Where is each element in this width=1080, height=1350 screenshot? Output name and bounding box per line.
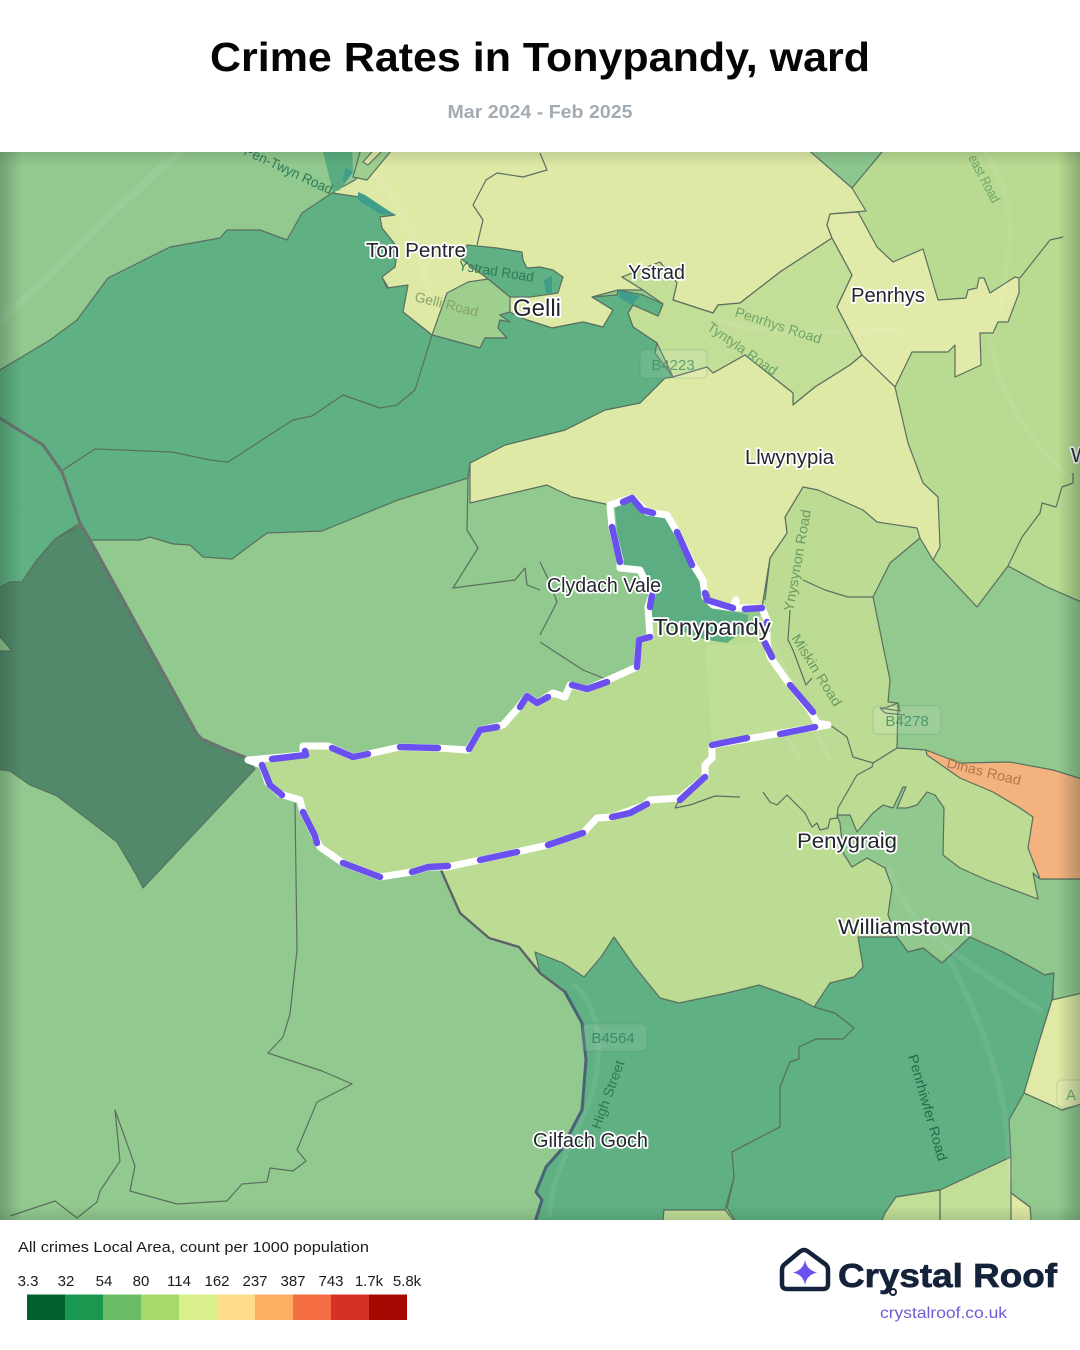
legend values: 743 bbox=[318, 1273, 344, 1290]
region: Penrhys yellow bbox=[827, 212, 1019, 387]
road name labels bbox=[242, 142, 1023, 1163]
map edge vignette bbox=[0, 152, 1080, 1220]
legend values bbox=[18, 1273, 422, 1290]
subtitle: date range: Mar 2024 - Feb 2025 bbox=[448, 101, 632, 122]
region: south and central light green bbox=[441, 487, 1040, 1050]
region: Dinas Road orange bbox=[926, 750, 1080, 879]
national border lines bbox=[0, 412, 586, 1225]
road: Ynysynon Road: Ynysynon Road bbox=[780, 508, 814, 613]
region: Williamstown mid green bbox=[837, 787, 1080, 1000]
legend values: 54 bbox=[96, 1273, 112, 1290]
road: High Street: High Street bbox=[588, 1058, 627, 1131]
water: teal stream patches bbox=[342, 168, 640, 305]
region: south-east pale yellow bbox=[1024, 990, 1080, 1110]
region: north-east light green bbox=[852, 152, 1080, 608]
region: Gelli light green bbox=[432, 279, 510, 348]
place: Gilfach Goch: Gilfach Goch bbox=[533, 1130, 648, 1152]
legend values: 1.7k bbox=[355, 1273, 384, 1290]
place: Tonypandy: Tonypandy bbox=[653, 614, 772, 640]
title: Crime Rates in Tonypandy, ward bbox=[210, 34, 870, 80]
region: north mid green triangle bbox=[810, 152, 883, 189]
place: Llwynypia: Llwynypia bbox=[745, 447, 835, 469]
region: north-west deep green bbox=[0, 193, 673, 592]
legend values: 162 bbox=[204, 1273, 230, 1290]
legend values: 5.8k bbox=[393, 1273, 422, 1290]
ward outline: white bbox=[248, 498, 828, 877]
road number shields bbox=[582, 350, 1080, 1107]
road: Miskin Road: Miskin Road bbox=[788, 631, 845, 709]
ward east streets tint bbox=[705, 643, 817, 745]
legend values: 237 bbox=[242, 1273, 268, 1290]
region: Gilfach Goch deep green bbox=[534, 937, 854, 1232]
road: Penrhiwfer Road: Penrhiwfer Road bbox=[905, 1052, 951, 1163]
website url: crystalroof.co.uk bbox=[880, 1305, 1008, 1322]
place: Ton Pentre: Ton Pentre bbox=[366, 240, 466, 262]
place: Williamstown: Williamstown bbox=[838, 916, 971, 939]
road: Gelli Road: Gelli Road bbox=[413, 288, 480, 320]
region: far-west darkest green bbox=[0, 525, 255, 888]
shield: B4223 bbox=[640, 350, 707, 378]
Tonypandy ward boundary bbox=[248, 498, 828, 877]
road: Penrhys Road: Penrhys Road bbox=[733, 304, 824, 347]
ward outline: purple dashes bbox=[262, 498, 815, 877]
legend values: 114 bbox=[167, 1273, 191, 1290]
shield: B4564: B4564 bbox=[591, 1030, 635, 1047]
ward deep green core bbox=[615, 500, 748, 643]
shield: A-road cut off bbox=[1057, 1080, 1080, 1107]
place: Ystrad: Ystrad bbox=[628, 262, 685, 284]
legend title: All crimes Local Area, count per 1000 population bbox=[18, 1239, 369, 1256]
legend values: 32 bbox=[58, 1273, 74, 1290]
legend bbox=[18, 1239, 422, 1320]
place: Penygraig: Penygraig bbox=[797, 830, 897, 853]
legend values: 387 bbox=[280, 1273, 306, 1290]
shield: B4278 bbox=[873, 706, 941, 734]
region: Gelli deep green patch bbox=[460, 245, 563, 297]
road: Ystrad Road: Ystrad Road bbox=[458, 257, 535, 285]
logo keyhole accent on the y bbox=[890, 1289, 896, 1295]
pale street network bbox=[372, 172, 1043, 1217]
region: top corner light patch bbox=[352, 152, 391, 181]
ward light green body bbox=[264, 622, 753, 874]
road: Twyn Road: Pen-Twyn Road bbox=[242, 142, 335, 197]
region: Llwynypia yellow bbox=[470, 355, 940, 607]
place: Clydach Vale: Clydach Vale bbox=[547, 575, 661, 597]
region: Williamstown deep green bbox=[727, 937, 1054, 1232]
region: top corner deep green bbox=[323, 152, 353, 192]
road: east Road: east Road bbox=[965, 152, 1004, 205]
shield: A-road cut off: A bbox=[1066, 1087, 1076, 1104]
place name labels bbox=[366, 240, 1080, 1152]
shield: B4564 bbox=[582, 1024, 647, 1051]
logo wordmark: Crystal Roof bbox=[838, 1257, 1058, 1294]
region: south light green plots bbox=[662, 1156, 1032, 1220]
region: Ystrad yellow bbox=[332, 152, 867, 334]
legend values: 3.3 bbox=[18, 1273, 38, 1290]
shield: B4278: B4278 bbox=[885, 713, 929, 730]
region: Ystrad south light green strip bbox=[622, 238, 862, 405]
road: Dinas Road: Dinas Road bbox=[945, 754, 1023, 788]
place: Gelli: Gelli bbox=[513, 295, 561, 322]
place: Penrhys: Penrhys bbox=[851, 285, 925, 307]
shield: B4223: B4223 bbox=[651, 357, 695, 374]
legend values: 80 bbox=[133, 1273, 149, 1290]
region: eastern light green edge bbox=[765, 487, 803, 600]
internal ward boundary lines bbox=[10, 153, 1080, 1218]
Crystal Roof logo bbox=[782, 1250, 1058, 1322]
icon: house with star bbox=[782, 1250, 828, 1289]
region: top corner yellow inset bbox=[362, 152, 382, 166]
legend colour bar bbox=[27, 1294, 407, 1320]
road: Tyntyla Road: Tyntyla Road bbox=[704, 318, 781, 378]
